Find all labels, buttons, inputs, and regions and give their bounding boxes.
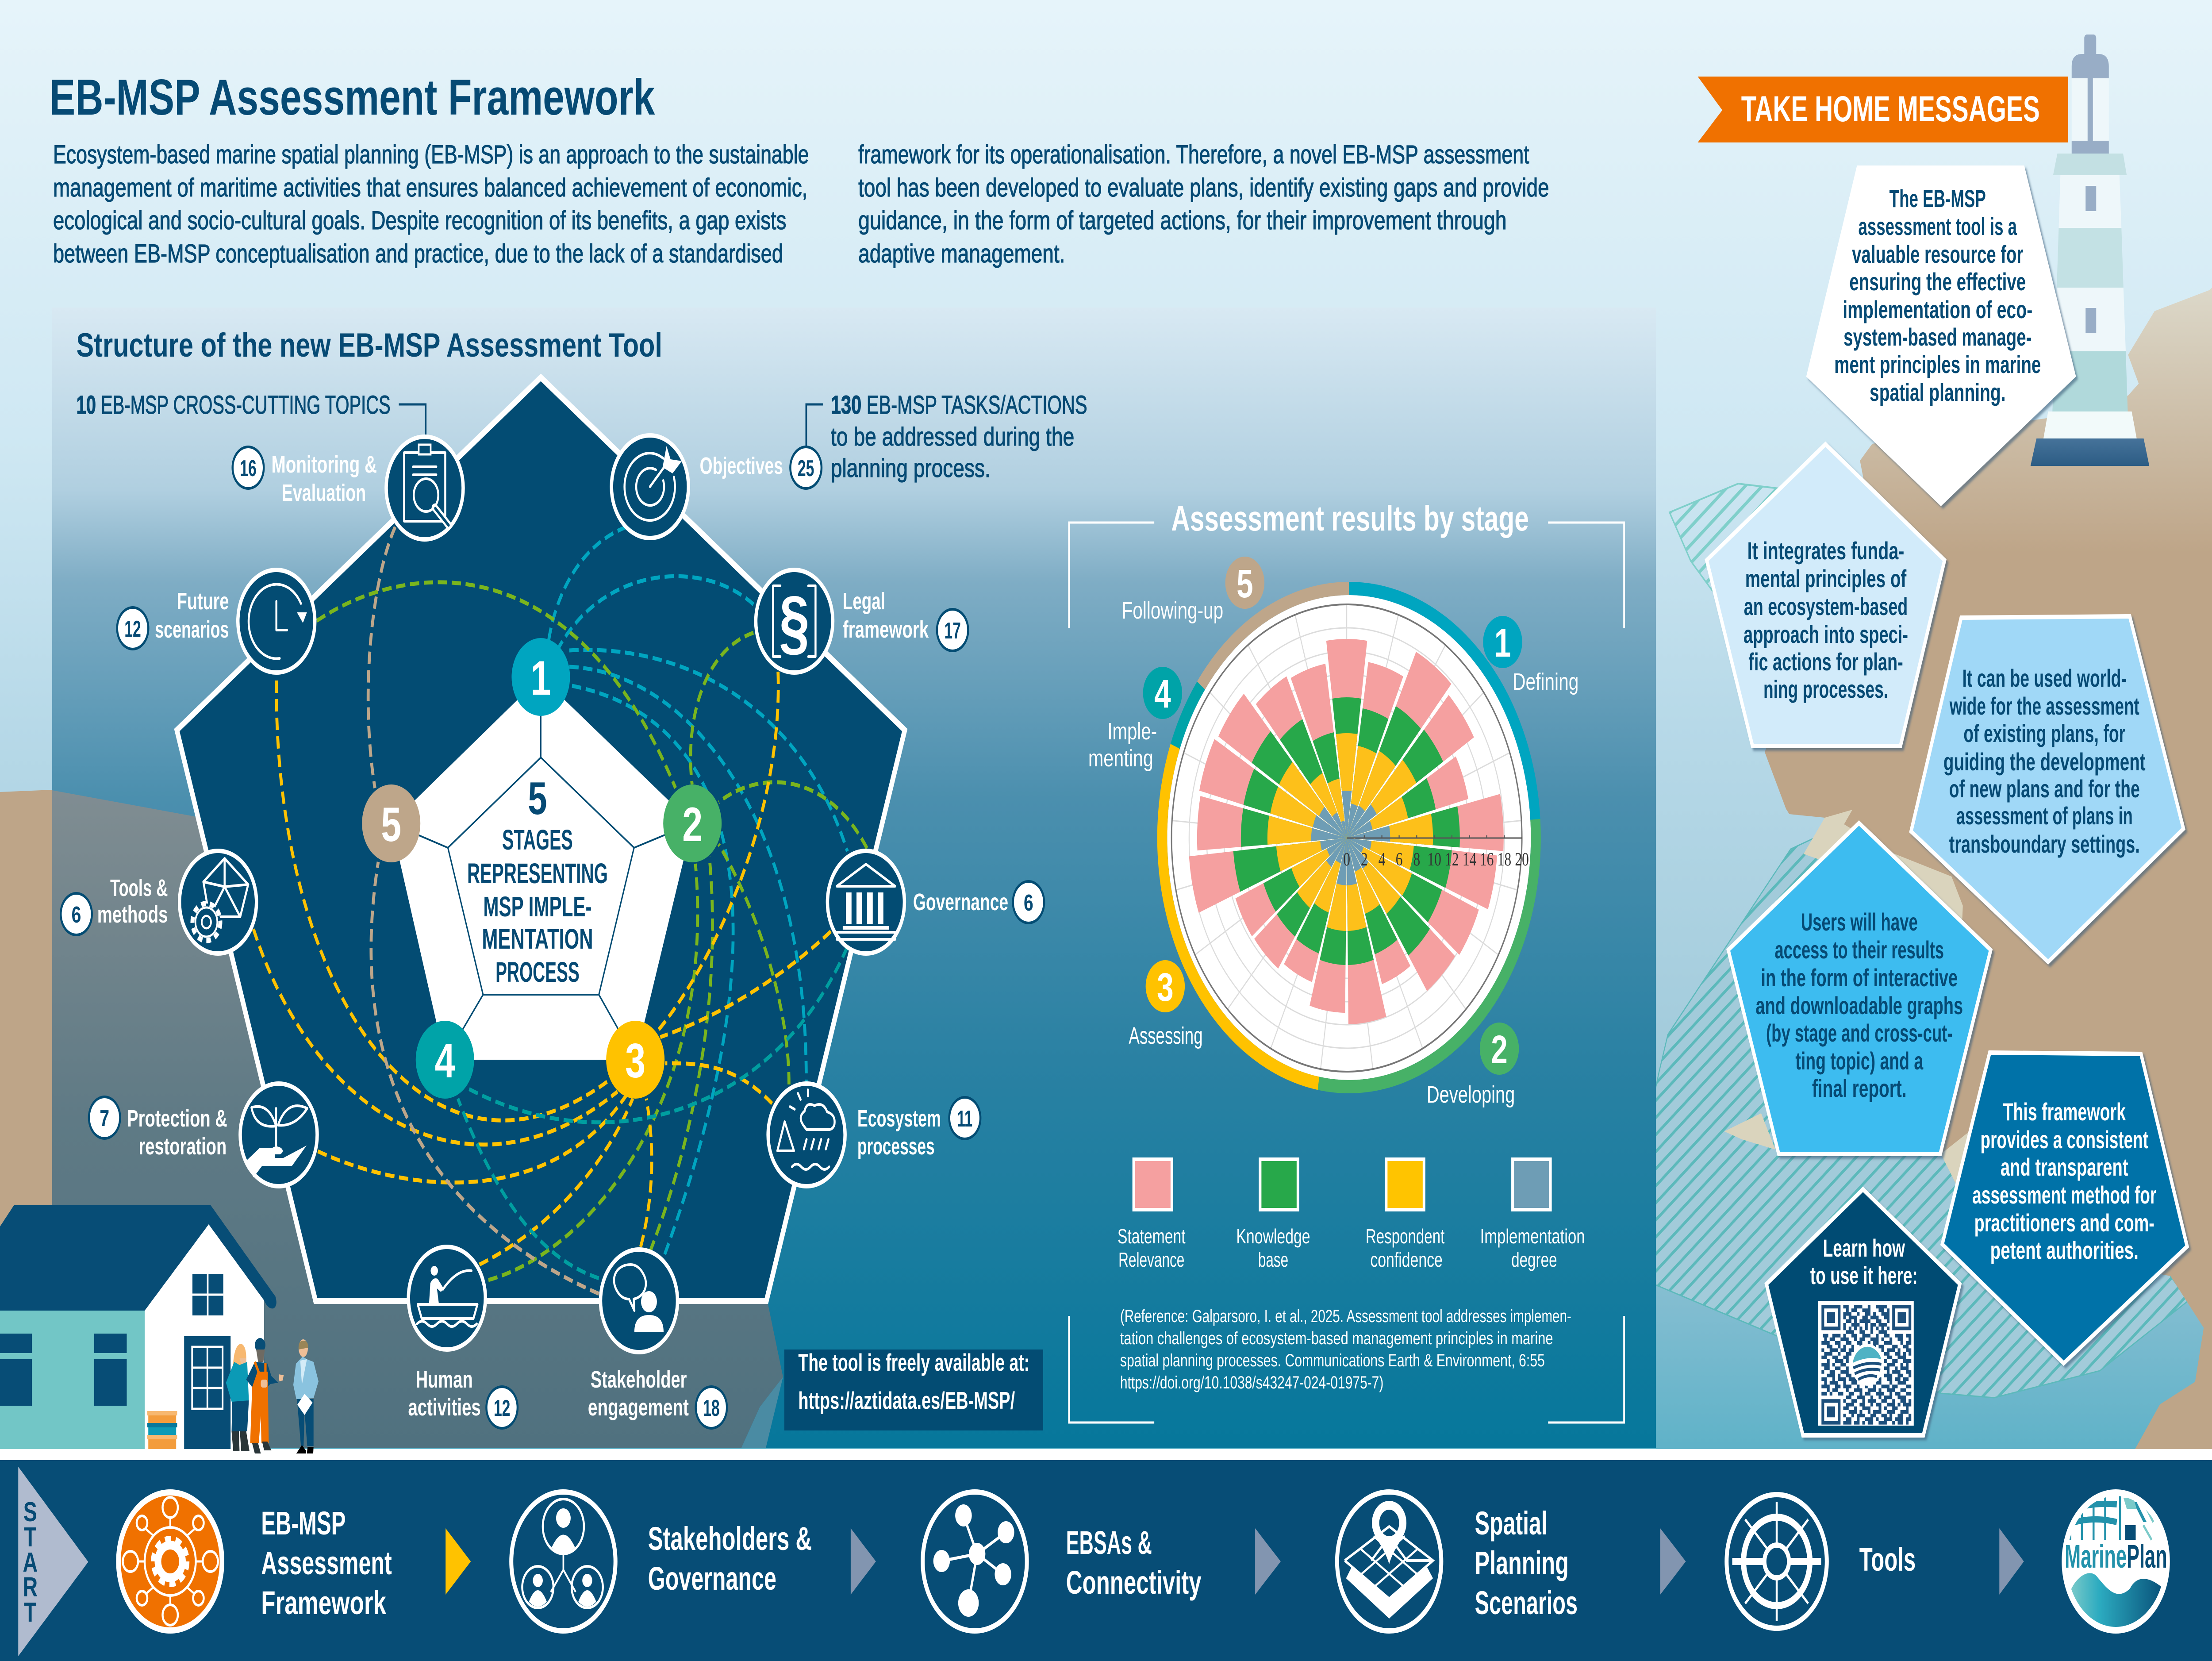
legend: knowledge base: Knowledge <box>1236 1225 1310 1248</box>
label: monitoring and evaluation: Monitoring & <box>271 451 377 478</box>
polar chart: assessment results: 14 <box>1463 850 1476 870</box>
START arrow: T <box>24 1521 36 1553</box>
message pentagon 1: ment principles in marine <box>1834 351 2041 378</box>
icon: legal framework: § <box>779 581 810 662</box>
message pentagon 3: wide for the assessment <box>1949 692 2139 720</box>
footer step label: assessment framework: EB-MSP <box>261 1505 346 1542</box>
center text: 5 stages: REPRESENTING <box>467 857 608 889</box>
message pentagon 3: assessment of plans in <box>1956 802 2133 830</box>
icon: human activities <box>408 1247 485 1350</box>
dashed connectors: stage 4 <box>458 947 847 1278</box>
message pentagon 5: practitioners and com- <box>1974 1209 2154 1237</box>
legend: implementation degree: degree <box>1511 1248 1557 1271</box>
footer step label: spatial planning: Scenarios <box>1475 1584 1578 1621</box>
center text: 5 stages: PROCESS <box>495 956 580 988</box>
reference text: https://doi.org/10.1038/s43247-024-01975-7) <box>1120 1373 1383 1392</box>
label: protection and restoration: Protection & <box>127 1105 227 1132</box>
footer step: EBSAs network icon <box>923 1492 1027 1631</box>
chart stage label: defining: 1 <box>1494 621 1511 665</box>
coastal land edge <box>741 1377 783 1448</box>
footer step: assessment framework icon <box>119 1492 222 1630</box>
label: human activities <box>408 1366 518 1428</box>
label: legal framework <box>843 588 968 651</box>
icon: ecosystem processes <box>768 1084 845 1186</box>
left coast land <box>0 790 52 1239</box>
label: objectives <box>700 447 822 488</box>
QR pentagon: Learn how <box>1823 1234 1905 1262</box>
message pentagon 3: It can be used world- <box>1962 665 2127 692</box>
footer step label: spatial planning <box>1475 1505 1578 1621</box>
white separator strip <box>0 1449 2212 1460</box>
footer step label: stakeholders: Governance <box>648 1560 776 1597</box>
stage circle 1: 1 <box>530 650 551 705</box>
chart stage label: defining: Defining <box>1513 669 1578 695</box>
intro text column 2: tool has been developed to evaluate plans, identify existing gaps and provide <box>858 173 1549 202</box>
inner white pentagon <box>391 677 692 1060</box>
icon: monitoring and evaluation <box>386 437 463 539</box>
icon: governance temple <box>827 851 904 954</box>
dashed connectors: stage 3 <box>253 672 831 1265</box>
tool availability box: The tool is freely available at: <box>798 1349 1029 1376</box>
person: consultant <box>293 1339 319 1453</box>
polar chart: assessment results: 16 <box>1480 850 1494 870</box>
footer step label: EBSAs: EBSAs & <box>1066 1524 1152 1561</box>
label: ecosystem processes: 11 <box>957 1105 972 1131</box>
label: human activities: 12 <box>494 1395 510 1421</box>
message pentagon 5: petent authorities. <box>1990 1237 2139 1264</box>
message pentagon 5: provides a consistent <box>1981 1126 2148 1153</box>
label: stakeholder engagement: Stakeholder <box>591 1366 687 1393</box>
reference text: tation challenges of ecosystem-based management principles in marine <box>1120 1329 1553 1348</box>
dashed connectors: stage 2 <box>317 582 867 1280</box>
cross-cutting topics callout: 10 EB-MSP CROSS-CUTTING TOPICS <box>76 391 391 419</box>
message pentagon 3: guiding the development <box>1943 748 2146 776</box>
footer step: tools ship wheel icon <box>1727 1495 1827 1628</box>
chart stage label: following-up: Following-up <box>1122 597 1223 624</box>
message pentagon 3: of new plans and for the <box>1949 775 2140 803</box>
label: objectives: 25 <box>798 455 814 481</box>
chart stage label: implementing: Imple- <box>1107 718 1157 745</box>
message pentagon 4: (by stage and cross-cut- <box>1766 1019 1953 1047</box>
stage circle 1 <box>511 638 570 716</box>
tasks callout: to be addressed during the <box>831 423 1074 451</box>
legend: knowledge base: base <box>1258 1248 1288 1271</box>
legend: respondent confidence <box>1366 1159 1444 1271</box>
chart stage label: following-up <box>1122 557 1264 624</box>
icon: stakeholder engagement <box>600 1250 677 1352</box>
chart stage label: implementing <box>1088 667 1182 772</box>
reference text: (Reference: Galparsoro, I. et al., 2025. Assessment tool addresses implemen- <box>1120 1307 1571 1326</box>
dashed connectors: stage 5 <box>368 527 599 1294</box>
chart stage label: implementing: menting <box>1088 745 1153 772</box>
footer step label: spatial planning: Planning <box>1475 1545 1569 1581</box>
footer step: spatial planning icon <box>1337 1492 1441 1631</box>
message pentagon 1: assessment tool is a <box>1859 213 2017 240</box>
footer step label: assessment framework: Assessment <box>261 1545 392 1581</box>
take home banner: TAKE HOME MESSAGES <box>1741 88 2040 129</box>
center text: 5 stages <box>467 773 608 988</box>
polar chart: assessment results: 8 <box>1413 850 1420 870</box>
footer step label: stakeholders: Stakeholders & <box>648 1520 812 1557</box>
arrow gray 3 <box>1660 1528 1686 1595</box>
message pentagon 1: ensuring the effective <box>1849 268 2026 296</box>
arrow gray 1 <box>851 1528 876 1595</box>
message pentagon 4: and downloadable graphs <box>1755 992 1963 1019</box>
footer step: stakeholders icon <box>511 1492 615 1631</box>
label: future scenarios <box>117 588 229 649</box>
sand patch lower <box>1941 1131 1971 1186</box>
message pentagon 2: fic actions for plan- <box>1748 648 1903 676</box>
chart stage label: following-up: 5 <box>1237 561 1253 606</box>
message pentagon 1: implementation of eco- <box>1843 296 2032 323</box>
icon: tools and methods <box>180 851 257 954</box>
QR pentagon: to use it here: <box>1810 1262 1918 1289</box>
lighthouse <box>2031 35 2149 466</box>
footer step label: EBSAs <box>1066 1524 1202 1601</box>
arrow gray 2 <box>1255 1528 1281 1595</box>
START arrow <box>18 1467 88 1656</box>
polar chart: assessment results: 6 <box>1396 850 1402 870</box>
label: legal framework: 17 <box>944 617 961 643</box>
big pentagon <box>177 377 905 1301</box>
label: governance <box>913 881 1044 923</box>
message pentagon 1: valuable resource for <box>1852 241 2023 268</box>
START arrow: T <box>24 1596 36 1628</box>
intro text column 2: framework for its operationalisation. Therefore, a novel EB-MSP assessment <box>858 140 1529 169</box>
label: tools and methods: methods <box>97 901 168 928</box>
START arrow: R <box>23 1571 38 1603</box>
footer step label: assessment framework: Framework <box>261 1584 386 1621</box>
legend: knowledge base <box>1236 1159 1310 1271</box>
intro text column 1: management of maritime activities that ensures balanced achievement of economic, <box>53 173 807 202</box>
center text: 5 stages: MENTATION <box>482 923 593 955</box>
message pentagon 1 <box>1806 165 2076 506</box>
icon: QR code <box>1818 1301 1914 1426</box>
message pentagon 2: approach into speci- <box>1743 621 1908 648</box>
stage circle 2: 2 <box>682 797 703 852</box>
arrow yellow <box>445 1528 471 1595</box>
message pentagon 4: ting topic) and a <box>1795 1047 1924 1075</box>
label: stakeholder engagement: 18 <box>703 1395 720 1421</box>
icon: objectives target <box>611 435 688 538</box>
dashed connectors: stage 1 <box>549 527 847 1257</box>
polar chart: assessment results: 12 <box>1445 850 1459 870</box>
message pentagon 1: system-based manage- <box>1843 323 2032 351</box>
label: legal framework: Legal <box>843 588 885 615</box>
label: future scenarios: Future <box>177 588 229 615</box>
label: ecosystem processes: Ecosystem <box>857 1105 941 1132</box>
reference text: spatial planning processes. Communications Earth & Environment, 6:55 <box>1120 1351 1545 1370</box>
START arrow: S <box>23 1496 37 1527</box>
label: future scenarios: 12 <box>124 615 141 642</box>
intro text column 1: between EB-MSP conceptualisation and practice, due to the lack of a standardised <box>53 239 783 268</box>
stage circle 3: 3 <box>625 1033 645 1088</box>
cross-cutting topics callout <box>76 391 426 435</box>
label: monitoring and evaluation: Evaluation <box>282 480 366 506</box>
arrow gray 4 <box>1999 1528 2024 1595</box>
stage circle 4 <box>416 1021 474 1099</box>
message pentagon 3: transboundary settings. <box>1949 830 2140 858</box>
icon: protection and restoration <box>240 1084 317 1186</box>
polar chart: assessment results: 0 <box>1343 850 1350 870</box>
label: tools and methods: 6 <box>72 901 81 927</box>
message pentagon 1: spatial planning. <box>1870 379 2006 406</box>
polar chart: assessment results: 18 <box>1498 850 1511 870</box>
label: protection and restoration: restoration <box>138 1133 227 1160</box>
label: legal framework: framework <box>843 616 929 643</box>
message pentagon 5: This framework <box>2003 1098 2126 1126</box>
message pentagon 3: of existing plans, for <box>1963 720 2125 747</box>
panel: structure background <box>52 308 1656 1448</box>
person: woman <box>226 1344 250 1451</box>
hatched marine zone lower <box>1637 838 2188 1398</box>
tool availability box: https://aztidata.es/EB-MSP/ <box>798 1387 1015 1414</box>
message pentagon 4: in the form of interactive <box>1761 964 1958 992</box>
message pentagon 4: access to their results <box>1775 936 1944 964</box>
legend: statement relevance <box>1118 1159 1186 1271</box>
stage circle 3 <box>606 1021 664 1099</box>
legend: statement relevance: Relevance <box>1118 1248 1184 1271</box>
footer bar <box>0 1460 2212 1661</box>
sand patch upper <box>1804 810 1963 922</box>
message pentagon 2: ning processes. <box>1763 676 1888 703</box>
polar chart: assessment results: 10 <box>1427 850 1441 870</box>
label: stakeholder engagement <box>588 1366 727 1428</box>
intro text column 2 <box>858 140 1549 268</box>
message pentagon 4 <box>1728 823 1991 1154</box>
START arrow: A <box>23 1546 38 1578</box>
chart stage label: developing <box>1427 1023 1519 1108</box>
tasks callout <box>806 391 1087 482</box>
label: ecosystem processes: processes <box>857 1133 935 1160</box>
icon: future scenarios clock <box>238 570 315 673</box>
legend: implementation degree: Implementation <box>1480 1225 1585 1248</box>
MarinePlan logo: MarinePlan <box>2065 1538 2167 1575</box>
chart stage label: assessing: 3 <box>1157 965 1174 1009</box>
polar chart: assessment results <box>1157 582 1541 1093</box>
label: protection and restoration <box>89 1097 227 1160</box>
footer step label: tools: Tools <box>1859 1541 1916 1578</box>
message pentagon 5 <box>1942 1053 2187 1363</box>
MarinePlan logo <box>2062 1489 2170 1637</box>
sand patch left <box>1724 1113 1775 1150</box>
legend: respondent confidence: Respondent <box>1366 1225 1444 1248</box>
house <box>0 1205 276 1449</box>
intro text column 1: Ecosystem-based marine spatial planning (EB-MSP) is an approach to the sustainable <box>53 140 809 169</box>
intro text column 1 <box>53 140 809 268</box>
intro text column 1: ecological and socio-cultural goals. Despite recognition of its benefits, a gap exists <box>53 206 786 235</box>
title: EB-MSP Assessment Framework <box>50 69 655 126</box>
center text: 5 stages: STAGES <box>502 824 573 856</box>
label: governance: Governance <box>913 889 1008 915</box>
center text: 5 stages: MSP IMPLE- <box>483 891 592 923</box>
label: governance: 6 <box>1024 889 1033 915</box>
label: monitoring and evaluation <box>233 447 377 506</box>
heading: assessment results: Assessment results by stage <box>1171 499 1529 538</box>
label: monitoring and evaluation: 16 <box>240 455 257 481</box>
label: objectives: Objectives <box>700 453 783 479</box>
legend: respondent confidence: confidence <box>1370 1248 1443 1271</box>
label: human activities: activities <box>408 1394 481 1421</box>
message pentagon 2: an ecosystem-based <box>1744 593 1908 620</box>
chart stage label: defining <box>1483 616 1578 695</box>
chart stage label: implementing: 4 <box>1154 672 1171 716</box>
label: tools and methods: Tools & <box>110 875 168 901</box>
QR pentagon <box>1767 1189 1960 1435</box>
chart stage label: developing: Developing <box>1427 1081 1515 1108</box>
message pentagon 4: Users will have <box>1801 908 1918 936</box>
label: future scenarios: scenarios <box>155 616 229 643</box>
message pentagon 2: It integrates funda- <box>1747 537 1904 565</box>
intro text column 2: guidance, in the form of targeted actions, for their improvement through <box>858 206 1507 235</box>
intro text column 2: adaptive management. <box>858 239 1065 268</box>
chart stage label: developing: 2 <box>1491 1027 1508 1072</box>
stage circle 5 <box>362 784 420 862</box>
label: ecosystem processes <box>857 1097 980 1160</box>
hatched marine zone upper <box>1670 484 1825 619</box>
bracket corners <box>1069 523 1624 1423</box>
label: protection and restoration: 7 <box>100 1105 109 1131</box>
label: stakeholder engagement: engagement <box>588 1394 689 1421</box>
message pentagon 4: final report. <box>1812 1075 1907 1102</box>
right coast land <box>1765 288 2212 1449</box>
take home banner <box>1698 77 2068 142</box>
footer step label: EBSAs: Connectivity <box>1066 1564 1202 1601</box>
tool availability box <box>784 1349 1043 1430</box>
polar chart: assessment results: 4 <box>1379 850 1385 870</box>
message pentagon 2 <box>1707 444 1945 746</box>
stage circle 2 <box>663 784 722 862</box>
message pentagon 5: assessment method for <box>1972 1181 2156 1209</box>
center text: 5 stages: 5 <box>528 773 547 824</box>
message pentagon 1: The EB-MSP <box>1889 185 1986 212</box>
heading: structure: Structure of the new EB-MSP Assessment Tool <box>76 327 662 364</box>
chart stage label: assessing: Assessing <box>1129 1023 1203 1049</box>
message pentagon 2: mental principles of <box>1745 565 1907 592</box>
footer step label: stakeholders <box>648 1520 812 1597</box>
person: worker <box>246 1338 284 1453</box>
message pentagon 5: and transparent <box>2001 1153 2128 1181</box>
tasks callout: planning process. <box>831 454 991 482</box>
footer step label: spatial planning: Spatial <box>1475 1505 1548 1542</box>
polar chart: assessment results: 20 <box>1515 850 1529 870</box>
legend: implementation degree <box>1480 1159 1585 1271</box>
polar chart: assessment results: 2 <box>1361 850 1368 870</box>
reference text <box>1120 1307 1571 1392</box>
tasks callout: 130 EB-MSP TASKS/ACTIONS <box>831 391 1087 419</box>
stage circle 4: 4 <box>435 1033 455 1088</box>
coastal land in panel <box>52 790 783 1448</box>
legend: statement relevance: Statement <box>1118 1225 1186 1248</box>
icon: legal framework <box>756 570 833 673</box>
label: tools and methods <box>61 875 168 935</box>
footer step label: assessment framework <box>261 1505 392 1621</box>
crates <box>147 1411 177 1449</box>
message pentagon 3 <box>1911 616 2184 962</box>
chart stage label: assessing <box>1129 960 1203 1049</box>
label: human activities: Human <box>416 1366 473 1393</box>
stage circle 5: 5 <box>381 797 401 852</box>
